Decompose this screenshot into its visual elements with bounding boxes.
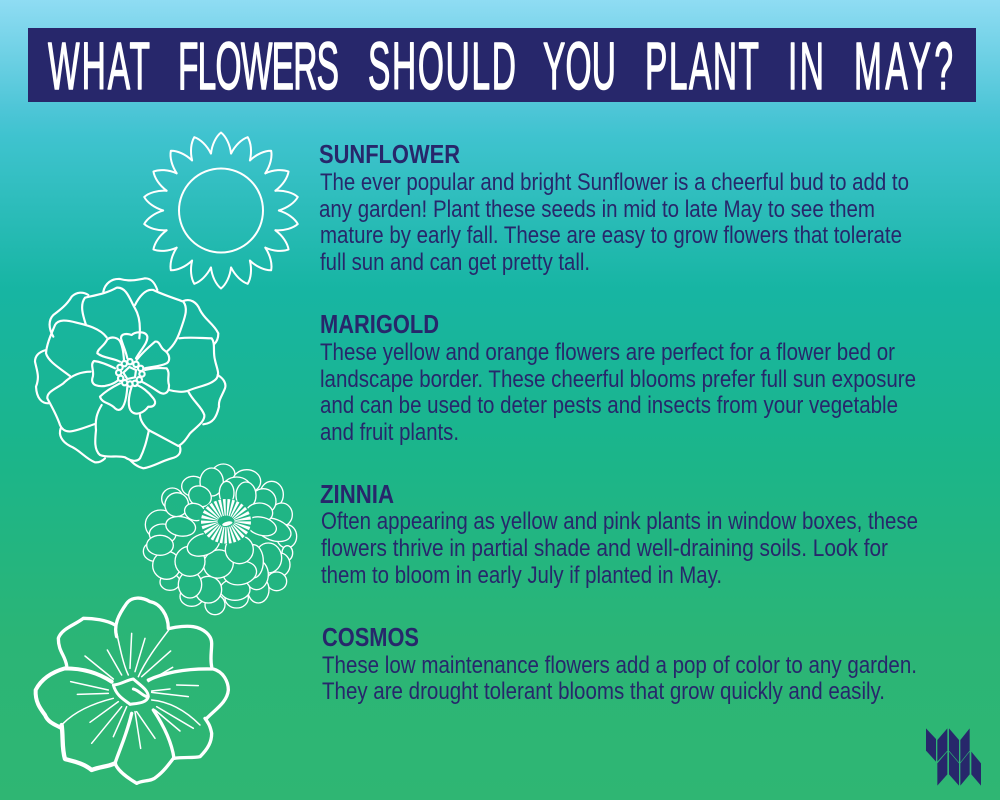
text block: zinnia — [320, 479, 918, 589]
text block: marigold: and fruit plants. — [320, 419, 459, 446]
text block: marigold: and can be used to deter pests and insects from your vegetable — [320, 392, 898, 419]
text block: cosmos: COSMOS — [322, 622, 419, 652]
icon: marigold — [35, 278, 225, 468]
text block: marigold — [320, 309, 916, 446]
text block: sunflower: full sun and can get pretty tall. — [320, 249, 590, 276]
text block: zinnia: flowers thrive in partial shade and well-draining soils. Look for — [321, 535, 888, 562]
title text — [48, 30, 953, 104]
text block: cosmos: They are drought tolerant blooms that grow quickly and easily. — [322, 678, 885, 705]
text block: cosmos — [322, 622, 917, 705]
title text: IN — [788, 30, 824, 104]
title text: WHAT — [48, 30, 150, 104]
icon: sunflower — [142, 132, 300, 288]
title text: PLANT — [645, 30, 759, 104]
text block: marigold: landscape border. These cheerful blooms prefer full sun exposure — [320, 366, 916, 393]
text block: sunflower: The ever popular and bright Sunflower is a cheerful bud to add to — [320, 169, 909, 196]
text block: cosmos: These low maintenance flowers add a pop of color to any garden. — [322, 652, 917, 679]
title text: MAY? — [854, 30, 953, 104]
text block: zinnia: ZINNIA — [320, 479, 394, 509]
title banner — [28, 28, 976, 104]
icon: logo mark — [926, 728, 981, 786]
icon: zinnia — [143, 464, 297, 615]
text block: sunflower: any garden! Plant these seeds in mid to late May to see them — [319, 196, 875, 223]
text block: sunflower: mature by early fall. These are easy to grow flowers that tolerate — [320, 222, 902, 249]
text block: zinnia: them to bloom in early July if planted in May. — [321, 562, 722, 589]
cosmos petal dividers and streaks — [63, 625, 200, 748]
text block: marigold: These yellow and orange flowers are perfect for a flower bed or — [320, 339, 895, 366]
title text: YOU — [543, 30, 616, 104]
text block: sunflower: SUNFLOWER — [319, 139, 460, 169]
icon: cosmos — [36, 598, 228, 783]
text block: sunflower — [319, 139, 909, 276]
text block: marigold: MARIGOLD — [320, 309, 439, 339]
cosmos center — [113, 679, 148, 704]
title text: FLOWERS — [178, 30, 339, 104]
title text: SHOULD — [368, 30, 516, 104]
